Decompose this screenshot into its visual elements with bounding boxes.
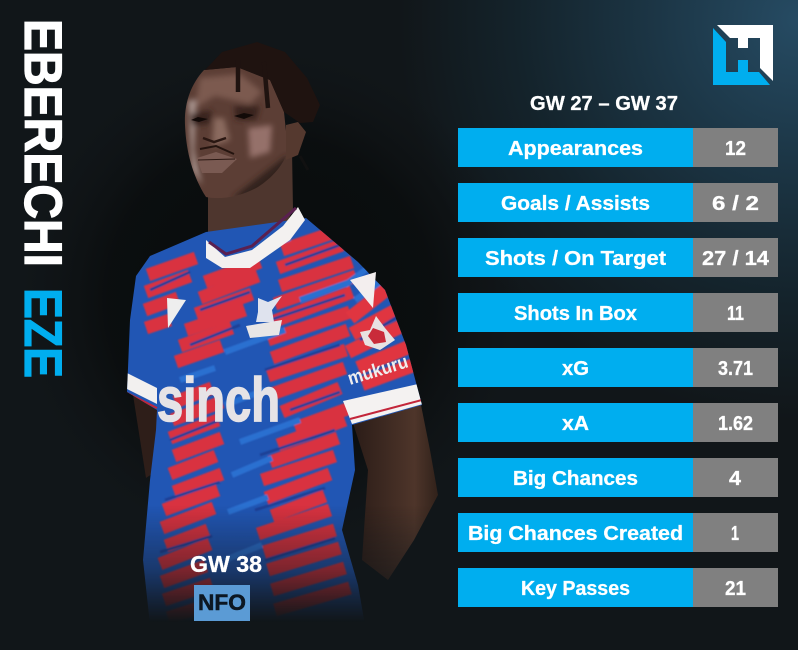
row: goals and assists: 6 / 2 xyxy=(712,193,759,215)
name: surname: EZE xyxy=(13,288,72,378)
row: shots and on target: Shots / On Target xyxy=(485,248,666,270)
face: moustache xyxy=(200,146,234,154)
player: neck xyxy=(208,150,293,256)
shirt: left chest kit logo xyxy=(167,298,186,328)
row: shots and on target: 27 / 14 xyxy=(702,248,770,270)
face: eyes xyxy=(191,113,254,122)
face: eye socket shadow xyxy=(190,106,260,126)
row: goals and assists xyxy=(458,183,778,222)
face: nose highlight xyxy=(212,118,230,146)
shirt: sleeve kit logo xyxy=(350,272,376,308)
shirt: sponsor wordmark: sinch xyxy=(157,366,280,435)
player photo xyxy=(120,42,438,630)
row: big chances: Big Chances xyxy=(513,468,638,490)
row: xA xyxy=(458,403,778,442)
row: xG: 3.71 xyxy=(718,358,753,380)
player: shirt xyxy=(120,210,430,630)
player: right arm xyxy=(352,400,438,580)
row: shots in box: Shots In Box xyxy=(514,303,637,325)
row: key passes xyxy=(458,568,778,607)
shirt: left cuff xyxy=(125,372,157,404)
hair: dreadlocks xyxy=(238,60,268,108)
next fixture: opponent badge xyxy=(194,585,250,621)
player: face xyxy=(184,67,286,198)
row: big chances created: 1 xyxy=(731,523,739,545)
row: appearances: 12 xyxy=(725,138,746,160)
row: big chances xyxy=(458,458,778,497)
row: big chances created xyxy=(458,513,778,552)
shirt: collar xyxy=(206,207,305,268)
face: forehead highlight xyxy=(195,74,262,108)
shirt: sleeve wordmark: mukuru xyxy=(345,352,411,390)
next fixture: gameweek label: GW 38 xyxy=(190,551,262,577)
face: jaw shadow xyxy=(233,154,286,196)
shirt: club crest xyxy=(246,296,282,338)
row: shots and on target xyxy=(458,238,778,277)
row: big chances created: Big Chances Created xyxy=(468,523,683,545)
face: cheek highlight xyxy=(248,125,272,158)
row: shots in box: 11 xyxy=(727,303,744,325)
row: shots in box xyxy=(458,293,778,332)
row: big chances: 4 xyxy=(729,468,742,490)
row: goals and assists: Goals / Assists xyxy=(501,193,650,215)
row: key passes: Key Passes xyxy=(521,578,630,600)
shirt: right cuff xyxy=(343,384,423,424)
row: xA: xA xyxy=(562,413,589,435)
row: xG: xG xyxy=(562,358,589,380)
next fixture: opponent badge: NFO xyxy=(198,590,246,615)
row: xG xyxy=(458,348,778,387)
row: appearances xyxy=(458,128,778,167)
player: hair xyxy=(205,42,320,123)
player: ear xyxy=(286,122,306,160)
face: left edge highlight xyxy=(188,100,202,185)
stats heading: GW 27 – GW 37 xyxy=(530,93,678,115)
row: appearances: Appearances xyxy=(508,138,643,160)
row: key passes: 21 xyxy=(725,578,746,600)
face: nostrils xyxy=(203,138,226,142)
face: lips xyxy=(197,152,237,173)
shirt: sleeve badge xyxy=(360,316,395,350)
name: first name: EBERECHI xyxy=(13,19,72,267)
row: xA: 1.62 xyxy=(718,413,753,435)
logo xyxy=(713,25,773,85)
player: left arm xyxy=(133,395,158,478)
player: earring xyxy=(300,156,308,170)
stats table xyxy=(458,128,778,607)
